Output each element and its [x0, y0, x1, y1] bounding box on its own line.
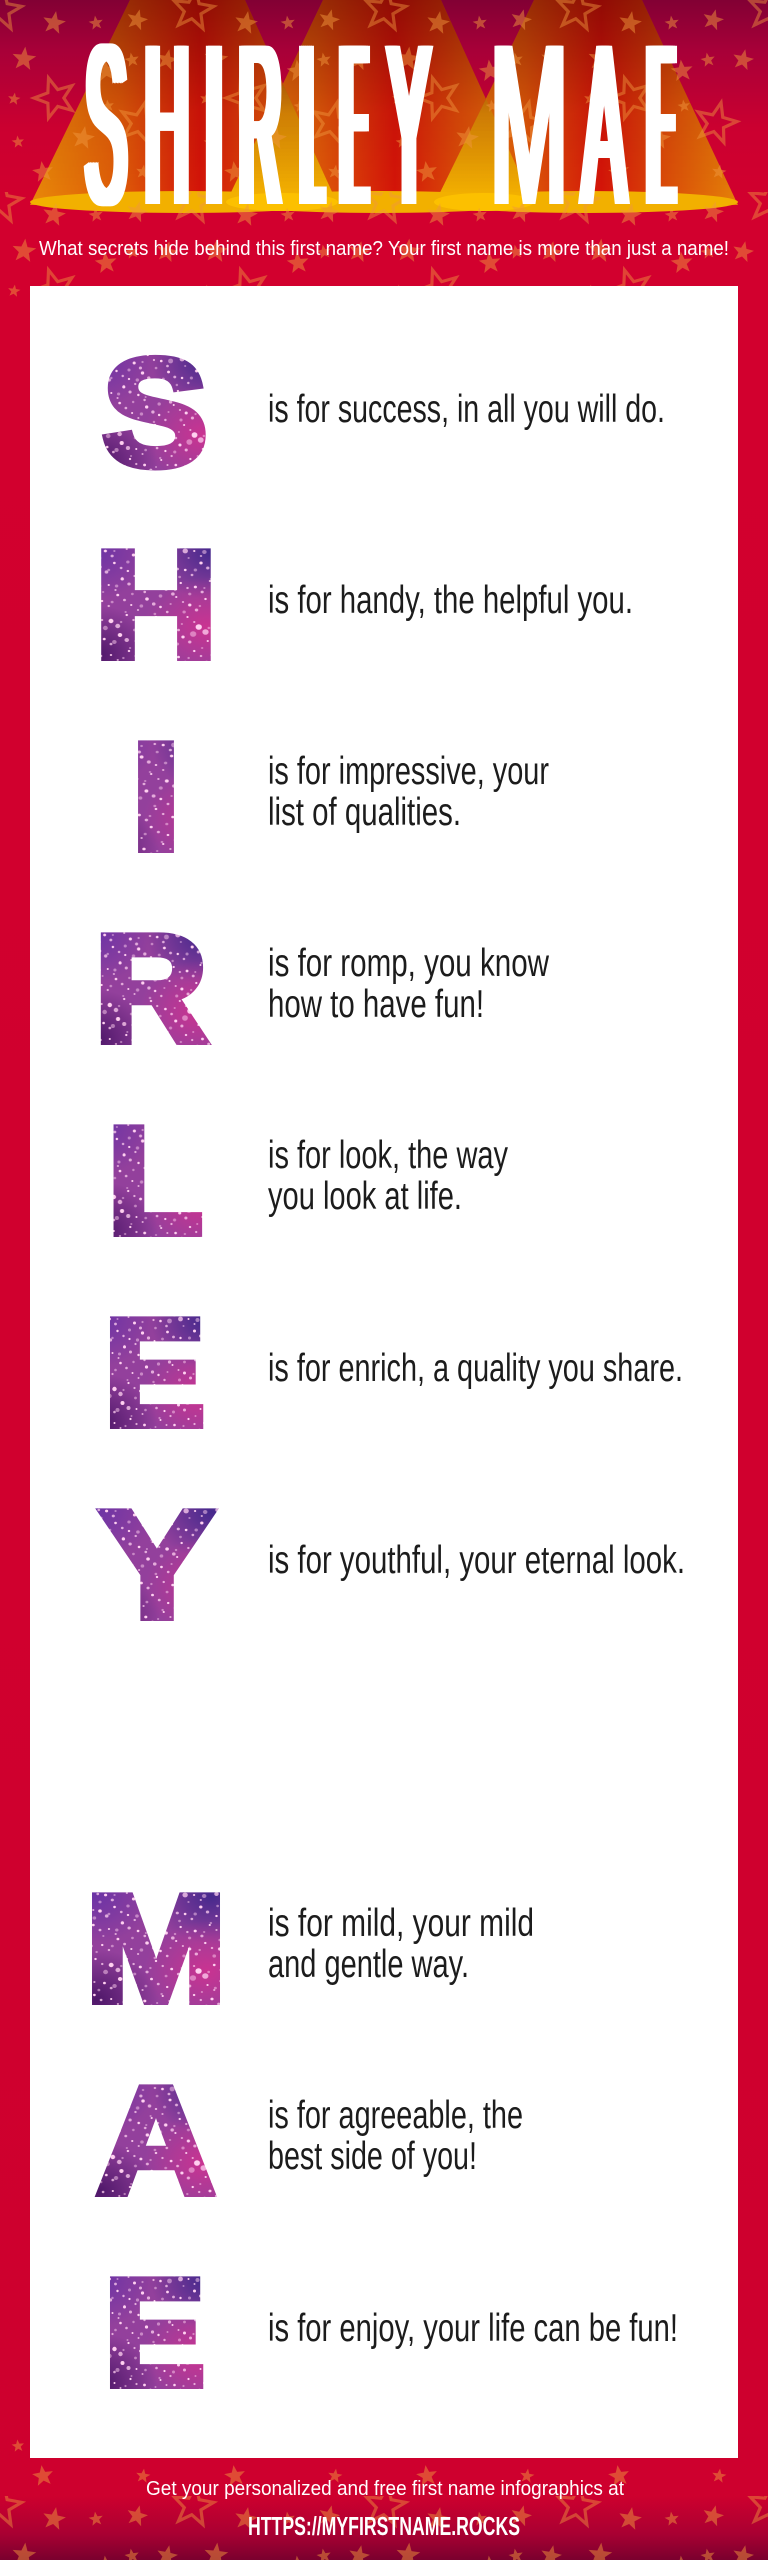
letter Y: Y: [100, 1480, 214, 1650]
text: [268, 750, 549, 834]
text: list of qualities.: [268, 791, 461, 834]
title: R: [239, 0, 281, 253]
letter L: L: [107, 1095, 203, 1266]
row: I: [131, 711, 549, 882]
letter H: H: [94, 521, 218, 690]
text: [268, 1902, 534, 1986]
row: E: [104, 1288, 683, 1458]
title: I: [208, 0, 220, 253]
text: is for mild, your mild: [268, 1902, 534, 1945]
letter I: I: [131, 711, 181, 882]
text: [268, 942, 550, 1026]
letter R: R: [94, 903, 208, 1074]
white panel: [30, 286, 738, 2458]
star pattern: footer: [0, 2432, 768, 2560]
text: is for impressive, your: [268, 750, 549, 793]
letter A: A: [97, 2056, 215, 2226]
title: [84, 0, 678, 253]
row: Y: [100, 1480, 685, 1650]
text: how to have fun!: [268, 983, 484, 1026]
title: L: [302, 0, 322, 253]
text: you look at life.: [268, 1175, 462, 1218]
row: M: [85, 1864, 534, 2034]
text: and gentle way.: [268, 1943, 469, 1986]
title: M: [490, 0, 568, 253]
text: is for handy, the helpful you.: [268, 579, 633, 622]
row: L: [107, 1095, 508, 1266]
title: Y: [388, 0, 430, 253]
letter M: M: [85, 1864, 227, 2034]
letter E: E: [104, 1288, 205, 1458]
row: R: [94, 903, 550, 1074]
text: is for agreeable, the: [268, 2094, 523, 2137]
spotlights: [0, 0, 768, 213]
tagline: What secrets hide behind this first name? Your first name is more than just a name!: [39, 238, 729, 260]
title: E: [648, 0, 674, 253]
row: H: [94, 521, 633, 690]
text: is for romp, you know: [268, 942, 550, 985]
title: H: [145, 0, 189, 253]
row: E: [104, 2248, 678, 2418]
row: S: [102, 328, 665, 497]
text: [268, 1134, 508, 1218]
text: is for look, the way: [268, 1134, 508, 1177]
text: [268, 2094, 523, 2178]
star pattern: header: [0, 0, 768, 300]
text: best side of you!: [268, 2135, 477, 2178]
letter S: S: [102, 328, 208, 497]
title: S: [85, 0, 127, 253]
letter E: E: [104, 2248, 205, 2418]
footer url: HTTPS://MYFIRSTNAME.ROCKS: [248, 2511, 520, 2541]
title: E: [341, 0, 367, 253]
footer line: Get your personalized and free first name infographics at: [146, 2478, 624, 2500]
title: A: [582, 0, 626, 253]
row: A: [97, 2056, 523, 2226]
